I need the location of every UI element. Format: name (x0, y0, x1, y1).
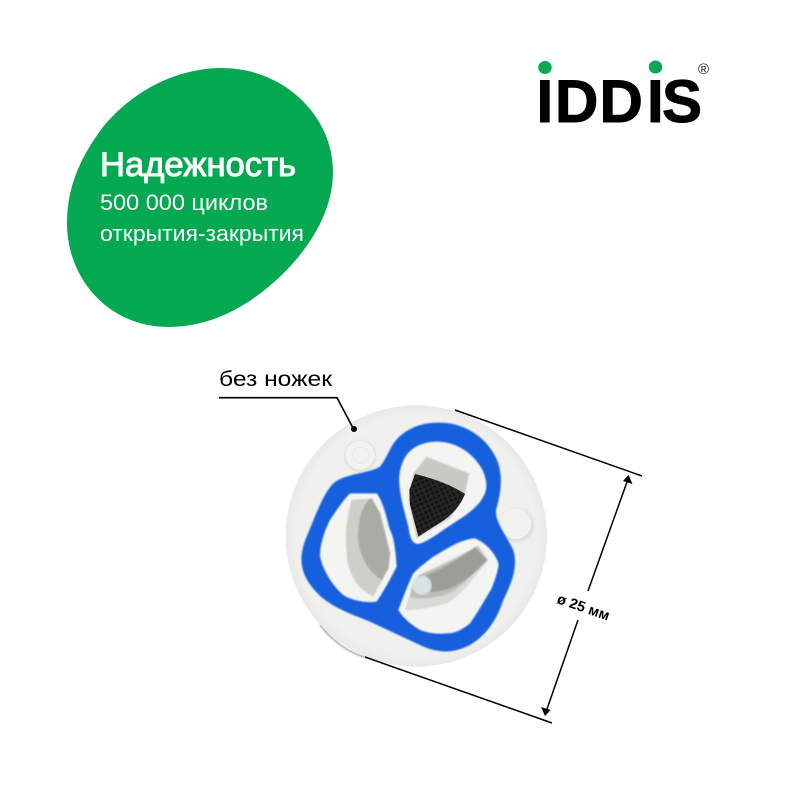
grey interior (409, 457, 469, 538)
peg top left (344, 440, 376, 472)
logo wordmark: IDDIS (536, 68, 702, 135)
black mesh (409, 474, 465, 537)
upper arrow (588, 475, 632, 591)
logo dot left (538, 61, 552, 74)
logo dot right (649, 60, 662, 74)
grey interior (405, 545, 488, 610)
cartridge disc photo (286, 405, 547, 667)
white rim (399, 442, 486, 544)
bottom right opening (398, 538, 499, 634)
mid grey band (410, 547, 487, 598)
disc body (286, 405, 547, 667)
white rim (398, 538, 499, 634)
disc shadow (320, 625, 365, 657)
callout leader line (219, 398, 353, 428)
heading: Надежность (100, 146, 296, 184)
white rim (320, 493, 397, 602)
lower arrow (541, 620, 578, 716)
dimension: diameter 25 mm (365, 410, 642, 723)
callout: without legs (219, 368, 357, 432)
dark grey interior (427, 547, 487, 592)
callout label: без ножек (219, 368, 333, 391)
top extension line (455, 410, 642, 476)
logo: IDDIS (536, 60, 709, 135)
dimension label: ø 25 мм (555, 592, 612, 624)
registered mark: ® (698, 61, 709, 78)
opening and closing text: открытия-закрытия (100, 221, 304, 246)
dark grey interior (358, 498, 390, 580)
bottom extension line (365, 657, 552, 723)
callout dot (351, 426, 357, 432)
top opening (399, 442, 486, 544)
grey interior (346, 498, 390, 597)
left opening (320, 493, 397, 602)
panel: green reliability blob (67, 68, 333, 327)
pale blue ball (412, 576, 432, 595)
peg right (501, 508, 534, 542)
green blob shape (67, 68, 333, 327)
blue gasket (301, 423, 515, 651)
cycles text: 500 000 циклов (100, 190, 268, 215)
